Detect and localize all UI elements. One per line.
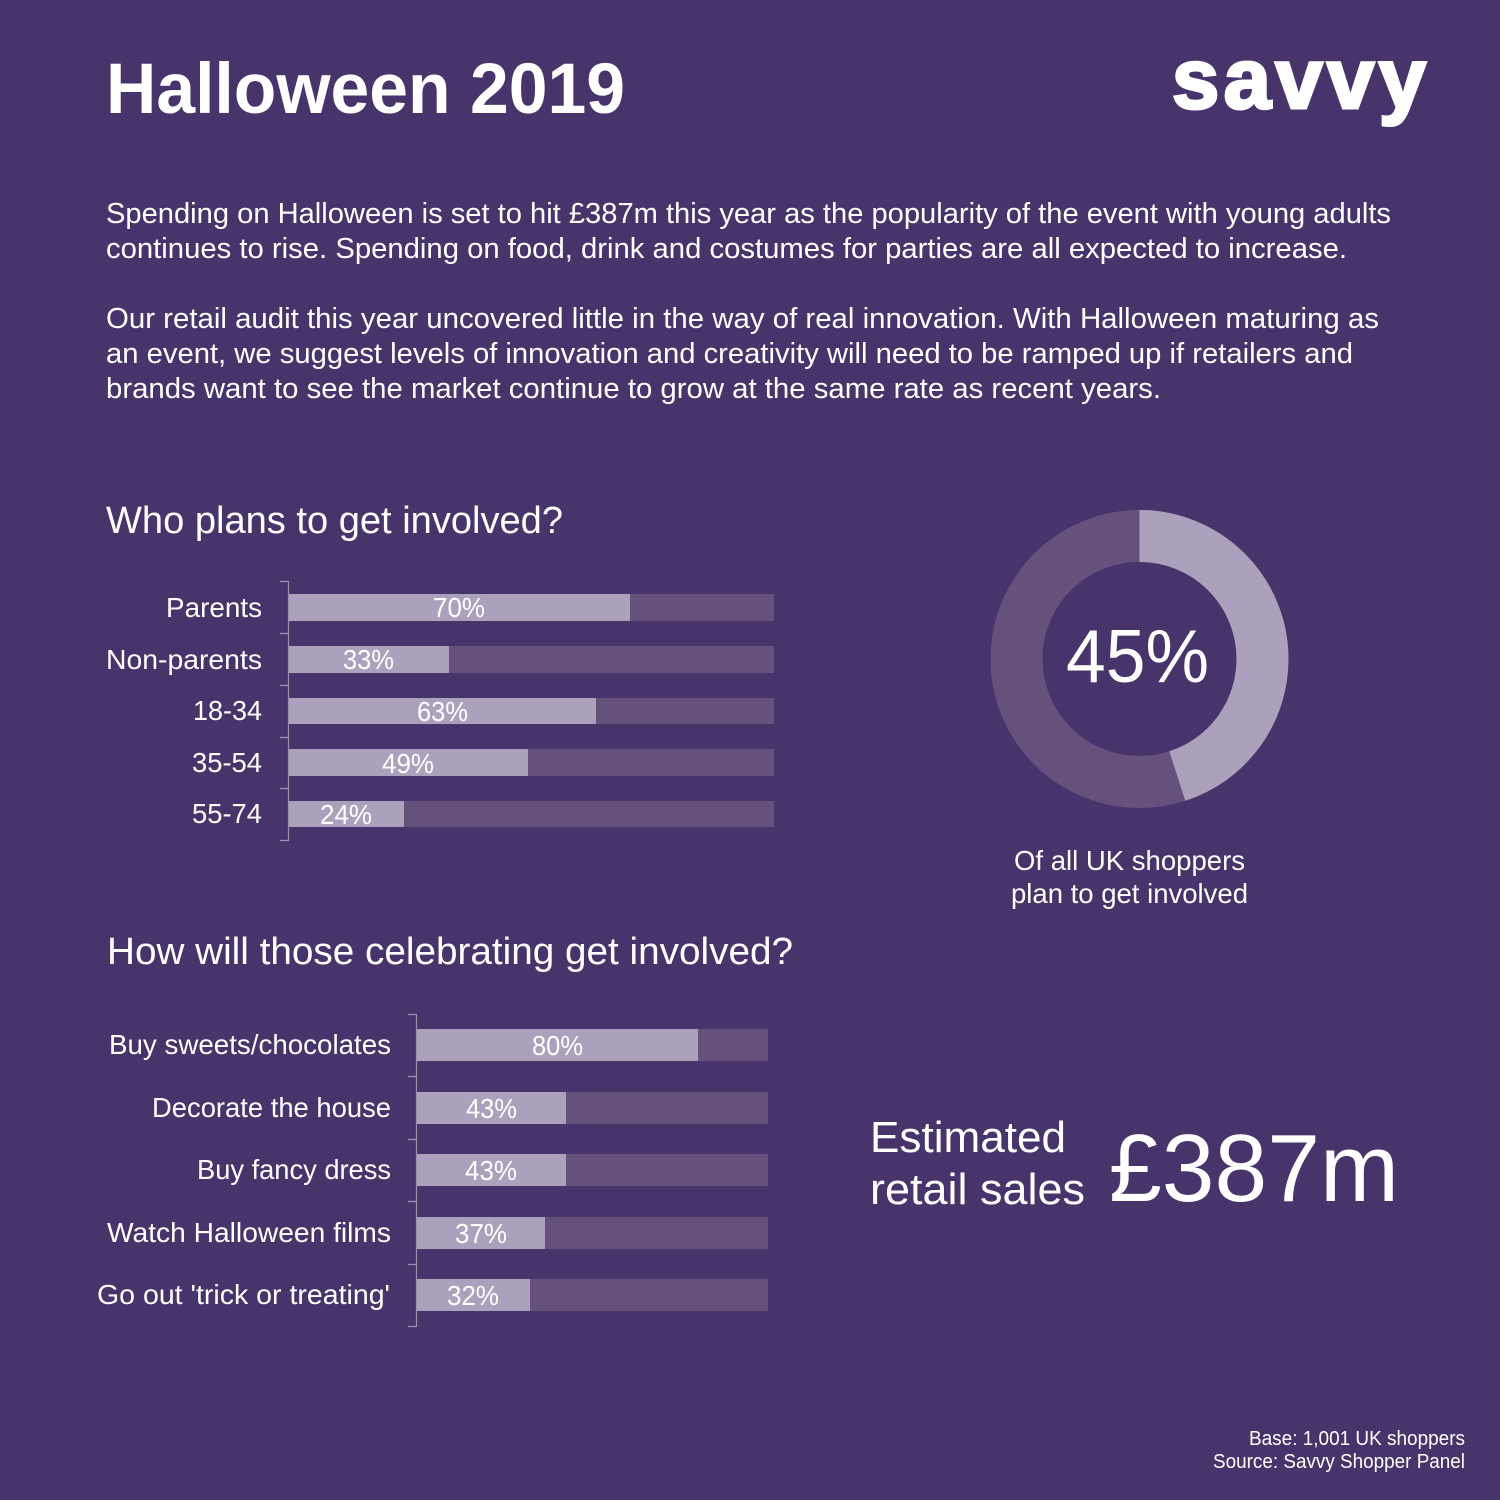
caption: donut chart: plan to get involved — [1011, 878, 1248, 909]
callout: estimated retail sales: Estimated — [870, 1113, 1066, 1162]
bar: go out trick or treating — [97, 1279, 768, 1311]
logo: savvy: savvy — [1172, 32, 1426, 127]
bar: buy sweets/chocolates — [109, 1029, 768, 1061]
text block: intro paragraph 2: an event, we suggest levels of innovation and creativity will need to be ramped up if retailers and — [106, 338, 1353, 370]
bar: non-parents: 33% — [343, 644, 394, 675]
bar: non-parents — [106, 644, 774, 675]
bar: 18-34 — [193, 695, 774, 727]
bar: watch halloween films — [107, 1217, 768, 1249]
callout: estimated retail sales: retail sales — [870, 1165, 1085, 1214]
caption: donut chart — [1011, 845, 1248, 909]
bar: parents — [166, 592, 774, 623]
caption: donut chart: Of all UK shoppers — [1014, 845, 1245, 876]
bar: 55-74 — [192, 798, 774, 830]
bar: 18-34: 63% — [417, 696, 468, 727]
bar: parents: 70% — [433, 592, 485, 623]
bar: 35-54: 49% — [382, 748, 434, 779]
bar: buy fancy dress: 43% — [465, 1155, 517, 1186]
bar: go out trick or treating: 32% — [447, 1280, 499, 1311]
bar: 35-54: 35-54 — [192, 747, 262, 778]
bar: buy sweets/chocolates: Buy sweets/chocolates — [109, 1029, 391, 1060]
bar: parents: Parents — [166, 592, 262, 623]
bar chart: who plans to get involved — [106, 582, 774, 840]
bar: buy fancy dress — [197, 1154, 768, 1186]
callout: estimated retail sales: £387m — [1109, 1115, 1399, 1222]
bar: go out trick or treating: Go out 'trick or treating' — [97, 1279, 390, 1310]
bar: non-parents: Non-parents — [106, 644, 262, 675]
heading: who plans to get involved: Who plans to get involved? — [106, 500, 563, 542]
bar: watch halloween films: Watch Halloween films — [107, 1217, 391, 1248]
text block: intro paragraph 1: Spending on Halloween is set to hit £387m this year as the popularity of the event with young adults — [106, 198, 1391, 230]
bar: buy sweets/chocolates: 80% — [532, 1030, 583, 1061]
source note: Source: Savvy Shopper Panel — [1213, 1451, 1465, 1473]
source note — [1213, 1428, 1465, 1473]
bar: decorate the house: Decorate the house — [152, 1092, 391, 1123]
bar: 55-74: 55-74 — [192, 798, 262, 829]
text block: intro paragraph 2: Our retail audit this year uncovered little in the way of real innovation. With Halloween maturing as — [106, 303, 1379, 335]
bar: 55-74: 24% — [320, 799, 372, 830]
text block: intro paragraph 1 — [106, 198, 1391, 265]
text block: intro paragraph 2: brands want to see the market continue to grow at the same rate as recent years. — [106, 373, 1161, 405]
bar: decorate the house — [152, 1092, 768, 1124]
heading: how will those celebrating get involved: How will those celebrating get involved? — [107, 931, 793, 973]
text block: intro paragraph 1: continues to rise. Spending on food, drink and costumes for parties are all expected to increase. — [106, 233, 1347, 265]
bar: decorate the house: 43% — [466, 1093, 517, 1124]
bar chart: how will those celebrating get involved — [97, 1014, 768, 1326]
donut chart: 45% of shoppers — [1016, 536, 1262, 782]
bar: 35-54 — [192, 747, 774, 779]
callout: estimated retail sales — [870, 1113, 1399, 1222]
bar: buy fancy dress: Buy fancy dress — [197, 1154, 391, 1185]
bar: watch halloween films: 37% — [455, 1218, 507, 1249]
title: Halloween 2019 — [106, 50, 625, 129]
source note: Base: 1,001 UK shoppers — [1249, 1428, 1465, 1450]
donut chart: 45% of shoppers: 45% — [1066, 614, 1209, 698]
text block: intro paragraph 2 — [106, 303, 1379, 405]
bar: 18-34: 18-34 — [193, 695, 262, 726]
